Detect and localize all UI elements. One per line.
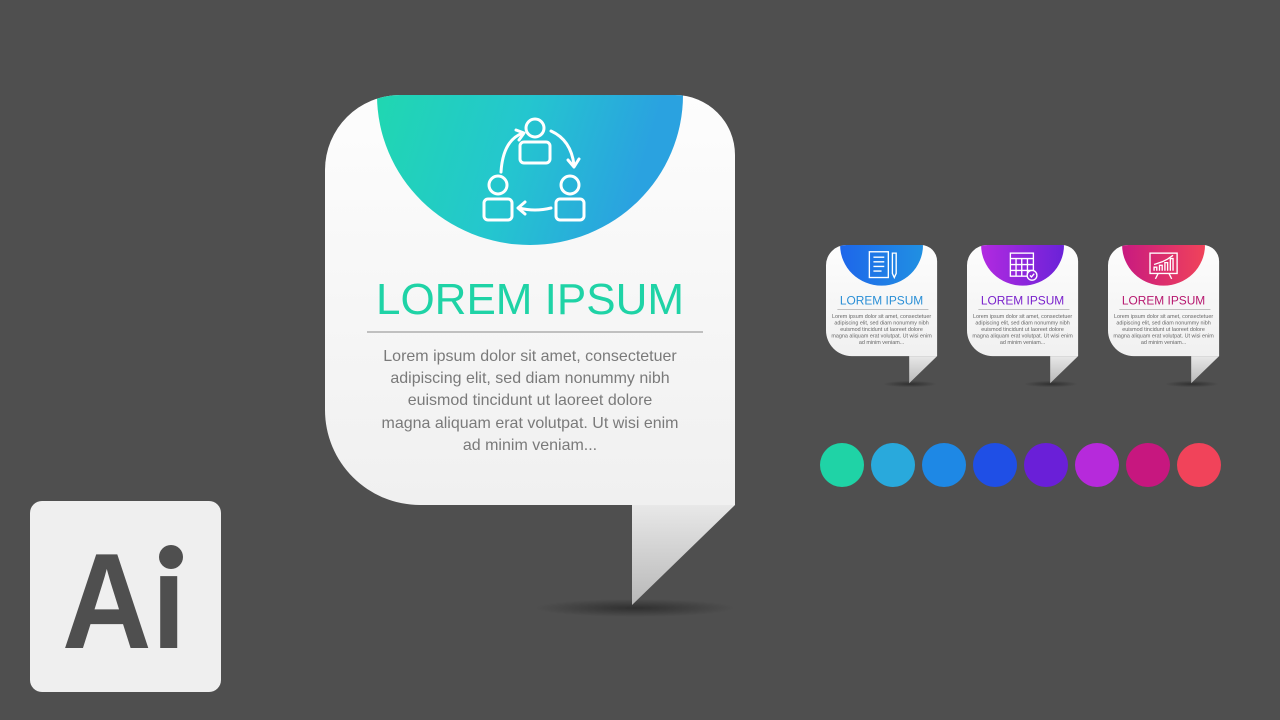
small card: pink <box>1108 245 1220 386</box>
header semicircle <box>377 95 683 245</box>
small card: blue: ad minim veniam... <box>859 340 905 346</box>
main card <box>325 95 735 614</box>
small card: blue: Lorem ipsum dolor sit amet, consectetuer <box>832 314 931 320</box>
small card: pink: Lorem ipsum dolor sit amet, consectetuer <box>1114 314 1213 320</box>
body text <box>381 348 679 454</box>
title: LOREM IPSUM <box>376 275 684 324</box>
small card: purple: LOREM IPSUM <box>981 293 1064 307</box>
body text: adipiscing elit, sed diam nonummy nibh <box>390 370 670 387</box>
small card: purple: euismod tincidunt ut laoreet dolore <box>981 327 1064 333</box>
small card: pink: euismod tincidunt ut laoreet dolore <box>1122 327 1205 333</box>
small card: purple: magna aliquam erat volutpat. Ut wisi enim <box>972 334 1073 340</box>
small card: purple: Lorem ipsum dolor sit amet, consectetuer <box>973 314 1072 320</box>
small card: pink: ad minim veniam... <box>1141 340 1187 346</box>
body text: euismod tincidunt ut laoreet dolore <box>408 392 652 409</box>
color swatches <box>820 443 1221 487</box>
body text: ad minim veniam... <box>463 437 597 454</box>
icon: chart board <box>1150 253 1177 279</box>
Ai logo <box>30 501 221 692</box>
icon: people cycle <box>484 119 584 220</box>
small card: blue: magna aliquam erat volutpat. Ut wisi enim <box>831 334 932 340</box>
small card: blue <box>826 245 938 386</box>
Ai logo: Ai <box>62 525 186 677</box>
small card: purple: ad minim veniam... <box>1000 340 1046 346</box>
body text: magna aliquam erat volutpat. Ut wisi enim <box>381 415 679 432</box>
icon: calendar <box>1010 253 1037 280</box>
body text: Lorem ipsum dolor sit amet, consectetuer <box>383 348 677 365</box>
small card: pink: magna aliquam erat volutpat. Ut wisi enim <box>1113 334 1214 340</box>
small card: purple: adipiscing elit, sed diam nonummy nibh <box>975 321 1070 327</box>
small card: blue: LOREM IPSUM <box>840 293 923 307</box>
small card: blue: euismod tincidunt ut laoreet dolore <box>840 327 923 333</box>
icon: document <box>869 252 896 278</box>
small card: pink: LOREM IPSUM <box>1122 293 1205 307</box>
small card: pink: adipiscing elit, sed diam nonummy nibh <box>1116 321 1211 327</box>
small card: purple <box>967 245 1078 386</box>
small card: blue: adipiscing elit, sed diam nonummy nibh <box>834 321 929 327</box>
